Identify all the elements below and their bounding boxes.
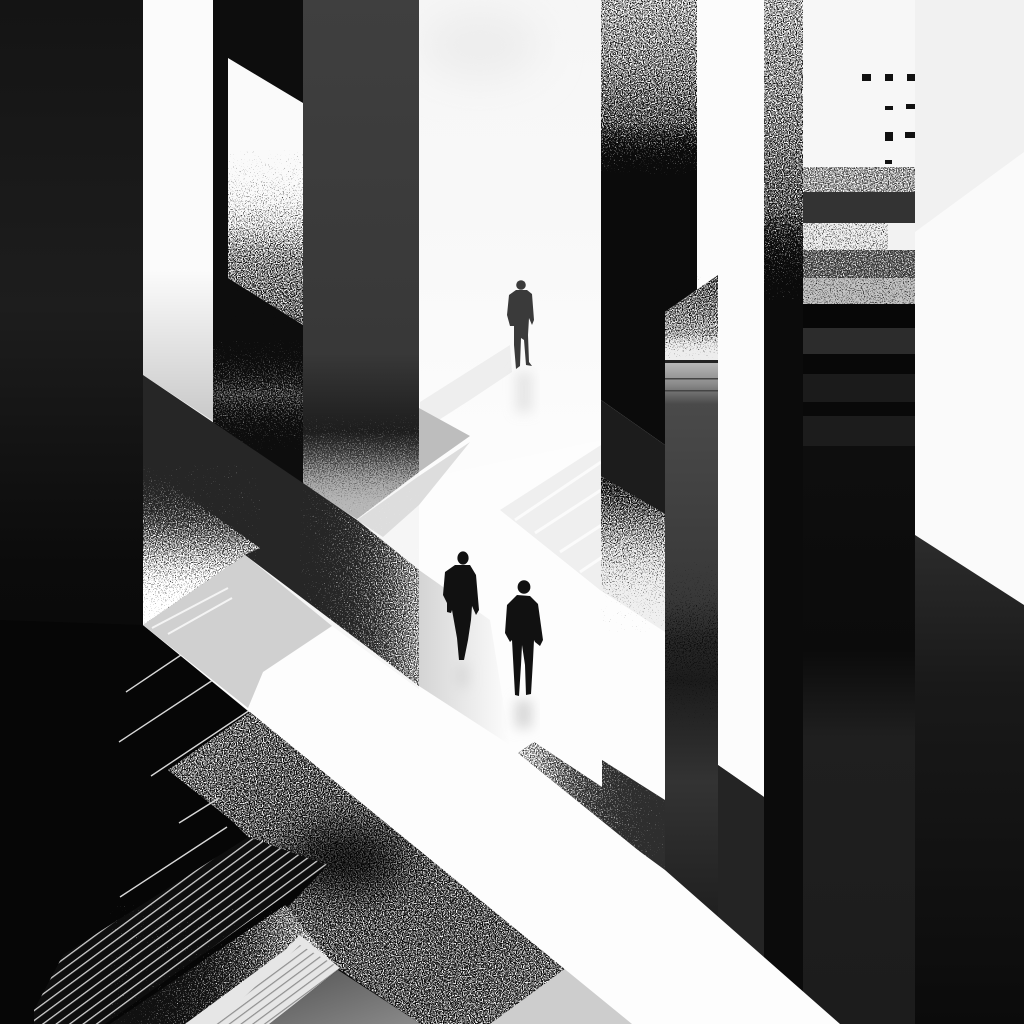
panel: grainy gray road shadow [160, 705, 570, 1024]
panel: horizontal stripes [803, 167, 915, 446]
panel: pale hatched block bottom [110, 905, 340, 1024]
icon: window dots [862, 74, 915, 164]
figure: right walker [505, 580, 543, 696]
panel: bottom light speckled wedge [490, 968, 635, 1024]
panel: bottom gray wedge [269, 970, 421, 1024]
panel: pale shadow strip [420, 345, 512, 432]
panel: dark base beside white column [718, 765, 764, 980]
panel: building facade with windows [803, 0, 915, 167]
panel: upper dark column [601, 0, 697, 470]
panel: white column left [143, 0, 213, 421]
panel: lower right dark mass [718, 440, 915, 1024]
panel: left black column [0, 0, 143, 1024]
panel: black lower left ground [0, 620, 630, 1024]
panel: speckled lower corridor edge [518, 742, 665, 872]
panel: pale floor beside figures [419, 570, 510, 745]
panel: central white corridor [419, 0, 665, 870]
panel: speckled diamond and strip [357, 408, 470, 537]
panel: tall white column [697, 0, 764, 797]
panel: medium column with speckled top [665, 275, 718, 940]
panel: far right white wall [915, 0, 1024, 610]
panel: narrow dark column [764, 0, 803, 1024]
figure: distant walker [507, 280, 534, 369]
figure: left walker [443, 551, 479, 660]
panel: far right dark block [915, 535, 1024, 1024]
panel: dark column pair left [213, 0, 419, 519]
panel: angled white window [228, 58, 303, 325]
panel: shadow floor under upper dark column [601, 400, 665, 514]
icon: figure reflections [456, 372, 532, 728]
panel: white diagonal road [143, 555, 840, 1024]
panel: faded floor stripes [500, 445, 665, 632]
panel: dark diagonal band [143, 375, 419, 686]
panel: diagonal hatch lines [34, 655, 328, 1024]
